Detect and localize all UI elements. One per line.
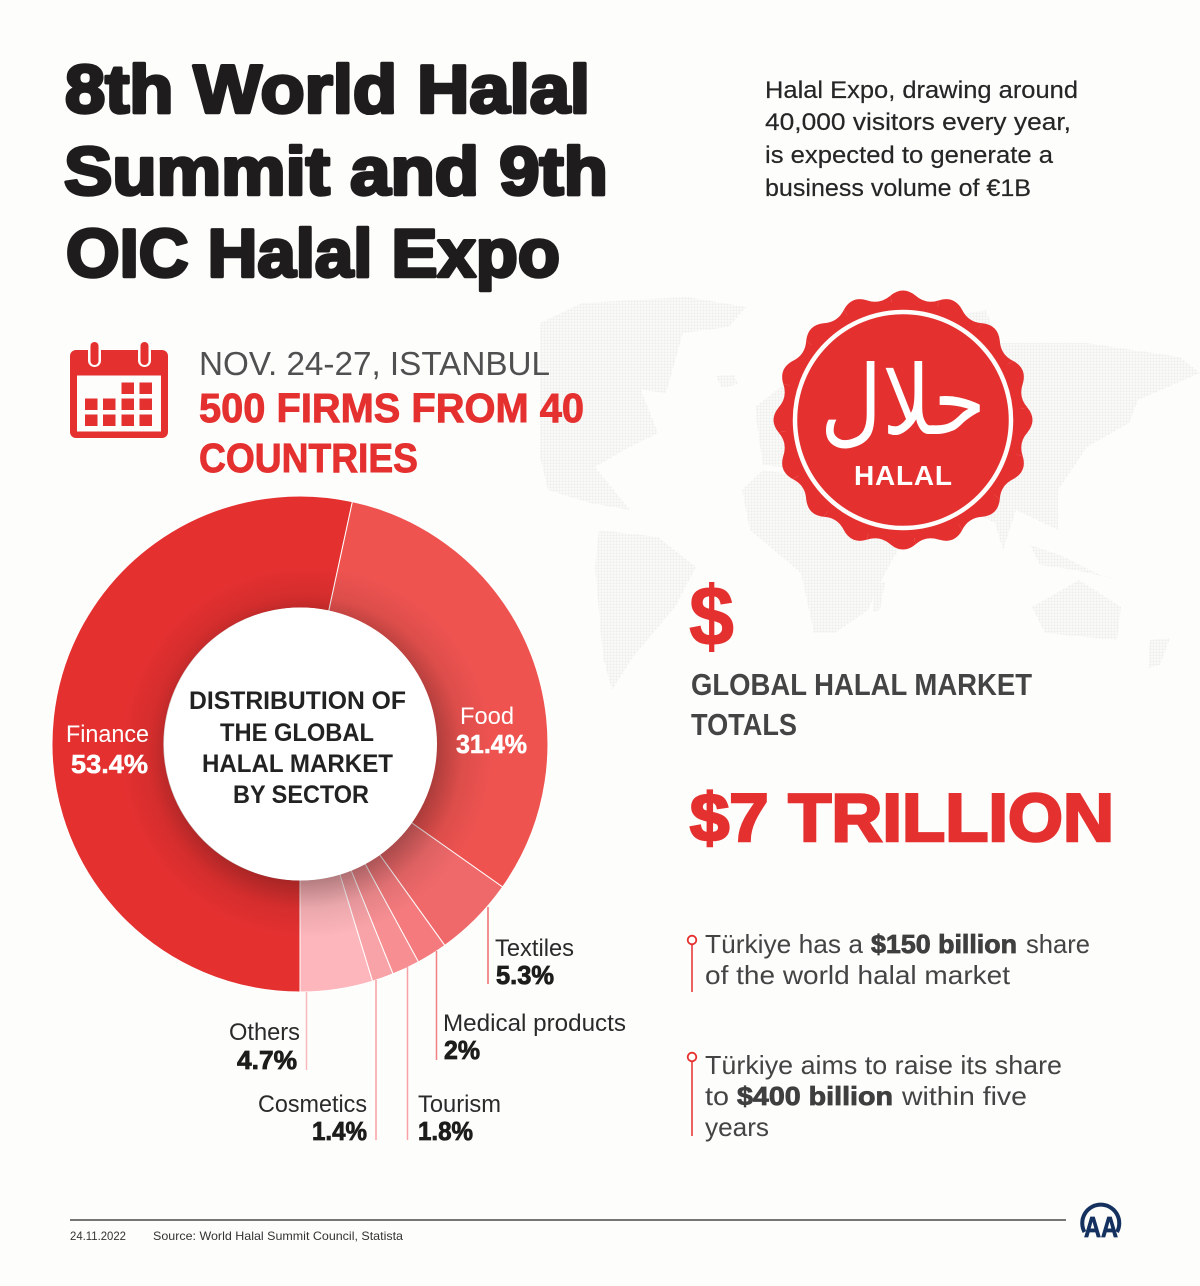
icon: dollar sign: $ <box>689 569 734 663</box>
label: Textiles: Textiles <box>495 935 574 962</box>
donut centre title: BY SECTOR <box>233 781 369 809</box>
event firms heading: COUNTRIES <box>199 435 418 481</box>
donut centre title: HALAL MARKET <box>202 750 393 778</box>
slice: Food 31.4% <box>329 502 548 887</box>
callout: Türkiye share: of the world halal market <box>705 960 1011 990</box>
label: Food: Food <box>460 703 514 730</box>
dotted world map background <box>540 297 1200 690</box>
slice: Finance 53.4% <box>52 496 352 992</box>
halal badge: حلال <box>820 345 986 457</box>
icon: AA logo <box>1082 1205 1119 1244</box>
halal badge: HALAL <box>854 460 952 491</box>
event firms heading <box>199 385 584 481</box>
event firms heading: 500 FIRMS FROM 40 <box>199 385 584 431</box>
intro text block: Halal Expo, drawing around <box>765 77 1078 104</box>
title: OIC Halal Expo <box>66 216 560 292</box>
callout: Türkiye share: share <box>1026 929 1090 959</box>
title: 8th World Halal <box>65 52 590 128</box>
donut chart: global halal market by sector <box>52 496 548 992</box>
callout: Türkiye target: years <box>705 1112 769 1142</box>
donut inner shadow <box>120 566 492 938</box>
callout: Türkiye share <box>688 929 1090 992</box>
halal badge <box>769 286 1037 554</box>
slice: Cosmetics 1.4% <box>340 870 393 981</box>
label: Others <box>229 1019 300 1075</box>
slice: Textiles 5.3% <box>379 822 503 945</box>
label: Medical products <box>443 1010 626 1065</box>
donut centre circle <box>164 608 437 880</box>
label: Cosmetics <box>258 1091 367 1146</box>
label: Medical products: Medical products <box>443 1010 626 1037</box>
footer rule <box>70 1219 1066 1221</box>
label: Medical products: 2% <box>444 1035 480 1065</box>
slice: Tourism 1.8% <box>351 864 418 974</box>
callout: Türkiye target: to <box>705 1081 729 1111</box>
intro text block <box>765 77 1078 202</box>
slice: Others 4.7% <box>300 874 372 992</box>
intro text block: 40,000 visitors every year, <box>765 109 1071 136</box>
label: Textiles: 5.3% <box>496 960 554 990</box>
icon: AA logo: AA <box>1084 1212 1118 1244</box>
label: Tourism <box>418 1091 501 1146</box>
donut centre title: THE GLOBAL <box>220 719 374 747</box>
slice: Medical products 2% <box>365 854 445 962</box>
label: Finance: 53.4% <box>71 749 148 779</box>
market total figure: $7 TRILLION <box>690 780 1114 856</box>
callout: Türkiye target: within five <box>901 1081 1027 1111</box>
footer source: Source: World Halal Summit Council, Statista <box>153 1229 403 1243</box>
label: Cosmetics: 1.4% <box>312 1116 367 1146</box>
market totals heading: GLOBAL HALAL MARKET <box>691 667 1032 702</box>
footer date: 24.11.2022 <box>70 1229 126 1243</box>
intro text block: business volume of €1B <box>765 175 1031 202</box>
donut centre title <box>189 687 406 809</box>
label: Food <box>456 703 527 759</box>
label: Others: 4.7% <box>237 1045 297 1075</box>
callout: Türkiye share: Türkiye has a <box>705 929 864 959</box>
label: Textiles <box>495 935 574 990</box>
title <box>64 52 608 292</box>
intro text block: is expected to generate a <box>765 142 1053 169</box>
label: Finance: Finance <box>66 721 149 748</box>
callout: Türkiye target: $400 billion <box>737 1081 893 1111</box>
leader lines <box>306 907 488 1140</box>
market totals heading <box>691 667 1032 742</box>
label: Cosmetics: Cosmetics <box>258 1091 367 1118</box>
donut centre title: DISTRIBUTION OF <box>189 687 406 715</box>
icon: calendar <box>70 340 168 438</box>
callout: Türkiye target <box>688 1050 1062 1142</box>
label: Finance <box>66 721 149 779</box>
label: Others: Others <box>229 1019 300 1046</box>
title: Summit and 9th <box>64 134 608 210</box>
label: Tourism: Tourism <box>418 1091 501 1118</box>
event date: NOV. 24-27, ISTANBUL <box>199 345 550 382</box>
callout: Türkiye target: Türkiye aims to raise its share <box>705 1050 1062 1080</box>
label: Tourism: 1.8% <box>418 1116 473 1146</box>
label: Food: 31.4% <box>456 729 527 759</box>
market totals heading: TOTALS <box>691 707 797 742</box>
callout: Türkiye share: $150 billion <box>871 929 1017 959</box>
